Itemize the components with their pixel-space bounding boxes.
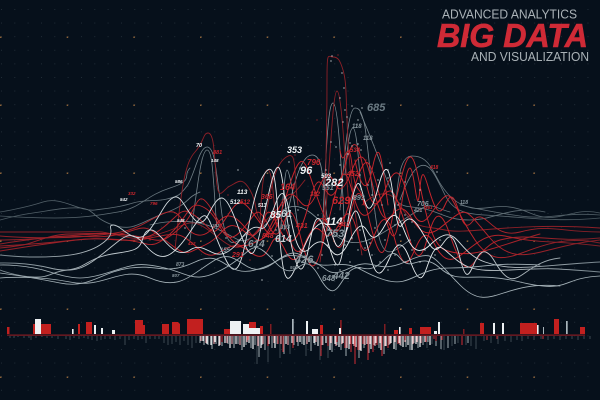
scatter points <box>185 56 440 280</box>
white labels: 61 <box>281 209 293 220</box>
white labels: 70 <box>196 143 202 149</box>
red labels: 848 <box>262 233 274 240</box>
gray labels: 442 <box>332 271 350 282</box>
red labels: 534 <box>350 148 361 154</box>
gray labels: 393 <box>280 225 291 231</box>
red labels: 361 <box>425 205 433 210</box>
white labels: 148 <box>211 158 219 163</box>
dark red bars <box>270 320 464 334</box>
gray labels: 155 <box>220 248 231 254</box>
white labels: 513 <box>258 203 267 209</box>
red labels <box>128 148 439 259</box>
red bars <box>7 319 585 334</box>
gray labels: 118 <box>352 124 362 130</box>
axis line <box>7 334 585 336</box>
pale gray-white wave lines <box>0 248 600 297</box>
white labels: 353 <box>287 145 302 155</box>
red labels: 164 <box>280 182 295 192</box>
red labels: 341 <box>338 222 350 229</box>
gray labels: 282 <box>211 223 220 228</box>
data value labels <box>120 102 468 283</box>
gray labels: 118 <box>460 200 468 206</box>
gray labels: 893 <box>353 195 365 202</box>
gray labels: 916 <box>290 265 298 270</box>
white labels: 586 <box>175 179 183 184</box>
red labels: 366 <box>261 194 273 201</box>
white spikes <box>203 336 430 351</box>
gray wave lines <box>0 103 600 252</box>
white labels <box>120 102 386 245</box>
white labels: 114 <box>325 216 343 228</box>
red labels: 512 <box>240 200 251 206</box>
white labels: 503 <box>321 174 332 180</box>
white labels: 542 <box>120 197 128 202</box>
white labels: 548 <box>177 218 185 223</box>
gray labels: 706 <box>417 201 429 208</box>
white labels: 282 <box>324 177 343 189</box>
gray labels: 807 <box>172 273 180 278</box>
dark red wave lines <box>0 56 600 262</box>
gray labels: 648 <box>322 274 336 283</box>
gray labels: 753 <box>326 228 344 240</box>
gray labels <box>172 124 468 283</box>
white labels: 685 <box>367 102 386 114</box>
title: big data: BIG DATA <box>437 17 588 54</box>
white labels: 614 <box>275 234 292 245</box>
red labels: 629 <box>332 195 351 207</box>
bar chart: upper bars <box>7 319 585 334</box>
gray labels: 614 <box>248 239 265 250</box>
red wave lines <box>0 145 600 267</box>
white labels: 96 <box>300 165 313 177</box>
wave chart: data lines <box>0 56 600 297</box>
gray labels: 118 <box>363 136 373 142</box>
white bars <box>35 319 539 334</box>
red labels: 796 <box>150 201 158 206</box>
red labels: 418 <box>429 165 439 171</box>
pink spikes <box>201 336 426 350</box>
red labels: 452 <box>346 171 359 178</box>
title block <box>437 6 589 64</box>
title: and visualization: AND VISUALIZATION <box>471 49 589 64</box>
bar chart: lower spikes <box>10 336 590 364</box>
red labels: 332 <box>128 191 136 196</box>
gray labels: 426 <box>294 254 314 266</box>
red labels: 382 <box>310 192 321 198</box>
white labels: 512 <box>230 200 241 206</box>
gray labels: 551 <box>322 185 334 192</box>
dim gray spikes <box>10 336 590 364</box>
white labels: 85 <box>270 210 282 221</box>
red spikes <box>222 336 543 364</box>
red labels: 796 <box>307 158 321 167</box>
red labels: 412 <box>187 241 196 246</box>
faint red scatter points <box>150 55 420 260</box>
red labels: 881 <box>213 150 222 156</box>
gray bars <box>292 319 568 334</box>
gray labels: 873 <box>176 262 185 268</box>
white wave lines <box>0 167 600 279</box>
red labels: 291 <box>231 252 244 259</box>
red labels: 431 <box>295 223 308 230</box>
title: advanced analytics: ADVANCED ANALYTICS <box>442 6 577 22</box>
white labels: 113 <box>237 189 248 196</box>
light gray spikes <box>200 336 468 358</box>
gray labels: 421 <box>413 208 423 214</box>
